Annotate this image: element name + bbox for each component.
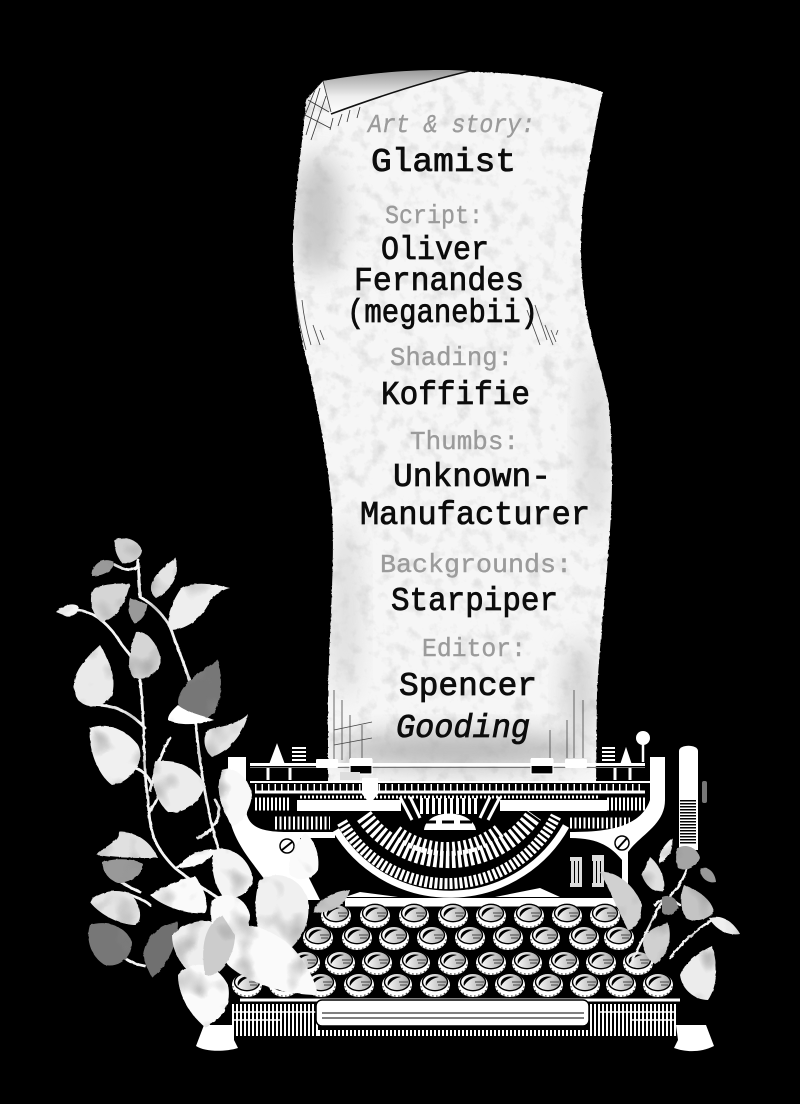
credit: script: (meganebii)	[347, 295, 538, 332]
credit: art and story: Art & story:	[366, 110, 535, 140]
paper sheet	[285, 60, 620, 790]
credit: thumbs: Manufacturer	[360, 497, 590, 534]
paper hatching	[295, 290, 583, 760]
page curl at top left	[303, 70, 470, 140]
credit: thumbs	[360, 427, 590, 534]
right vine leaves	[600, 838, 740, 1000]
credit: thumbs: Unknown-	[393, 459, 551, 496]
carriage white rails and hatch	[255, 797, 645, 823]
panel: paper scroll with credits	[285, 60, 620, 790]
screws	[280, 836, 629, 853]
credit: backgrounds: Backgrounds:	[380, 550, 572, 580]
credit: editor: Editor:	[422, 634, 526, 664]
feet	[196, 1025, 714, 1051]
base hatching	[232, 1012, 676, 1033]
left vine stems	[78, 560, 222, 966]
credit: shading	[381, 343, 530, 414]
credit: editor	[396, 634, 537, 747]
credit: shading: Koffifie	[381, 377, 530, 414]
left arm of frame	[228, 757, 335, 900]
keyboard deck	[235, 888, 680, 1000]
credit: backgrounds: Starpiper	[391, 583, 558, 620]
typewriter illustration	[196, 731, 714, 1051]
credit: thumbs: Thumbs:	[410, 427, 519, 457]
right vine stems	[632, 866, 712, 960]
credit: editor: Gooding	[396, 710, 530, 747]
credit: art and story	[366, 110, 535, 181]
leaf group middle	[88, 832, 350, 1027]
type basket	[336, 814, 566, 894]
platen ruler	[250, 778, 650, 804]
credit: script: Fernandes	[354, 263, 524, 300]
credit: script	[347, 201, 538, 332]
space bar	[316, 1000, 589, 1026]
right roller block	[570, 855, 604, 887]
credit: backgrounds	[380, 550, 572, 620]
keys	[232, 904, 673, 997]
credit: script: Script:	[385, 201, 483, 231]
credit: shading: Shading:	[390, 343, 513, 373]
right platen knob	[679, 746, 707, 850]
plant: right vine	[600, 838, 740, 1000]
credit: editor: Spencer	[399, 668, 537, 705]
right arm of frame	[570, 757, 665, 900]
credit: script: Oliver	[381, 232, 489, 269]
credit: art and story: Glamist	[371, 144, 516, 181]
plant: left vine	[56, 538, 350, 1027]
carriage top hardware	[250, 731, 650, 780]
leaf group upper	[56, 538, 252, 826]
